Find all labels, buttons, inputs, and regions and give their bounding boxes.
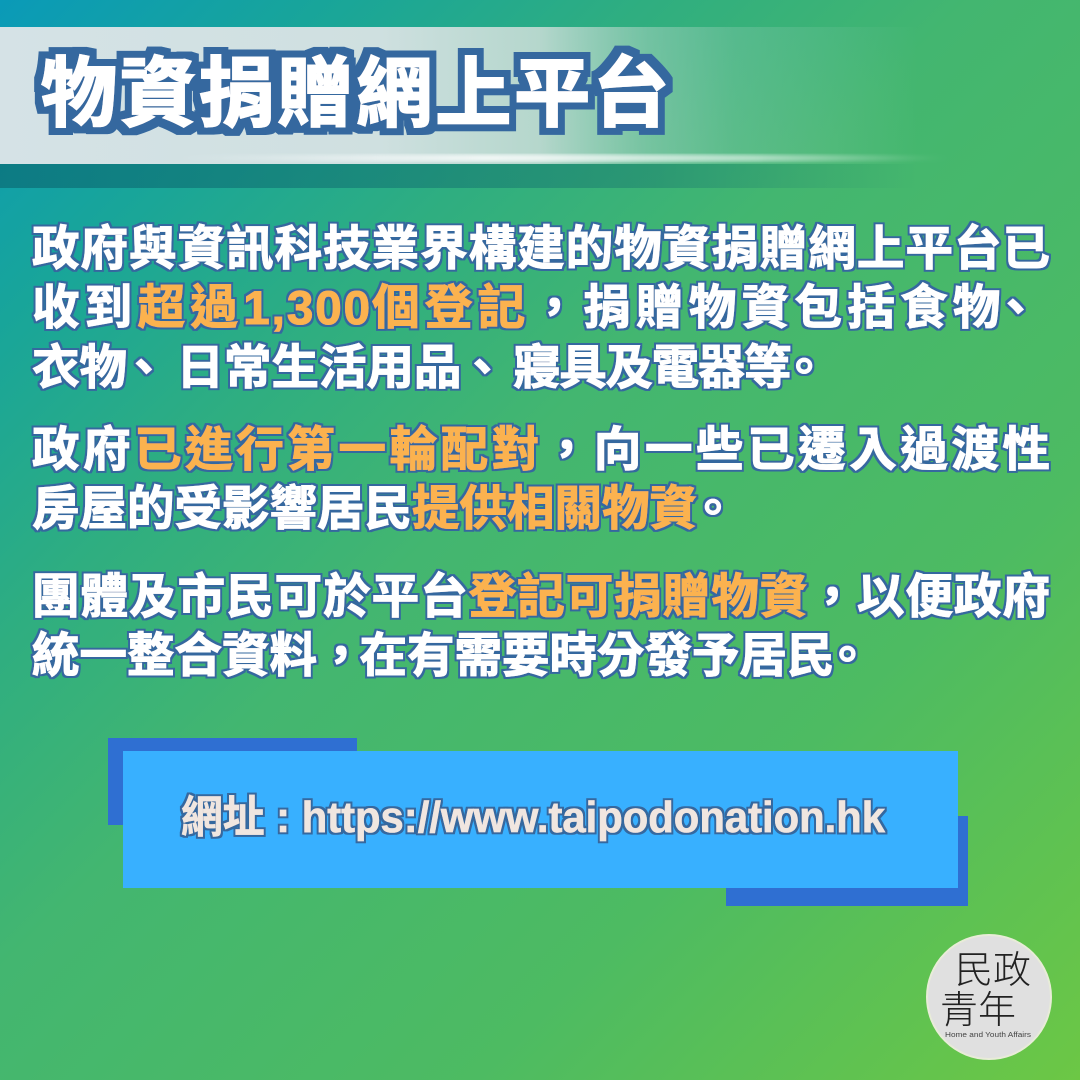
url text: 網址 : https://www.taipodonation.hk — [181, 793, 886, 842]
title band — [0, 27, 1080, 188]
paragraph: platform registrations — [32, 223, 1050, 395]
paragraph: first round matching: 政府已進行第一輪配對，向一些已遷入過渡性 — [32, 424, 1050, 477]
paragraph: platform registrations: 衣物、日常生活用品、寢具及電器等。 — [32, 342, 828, 395]
logo: 民政青年 — [927, 935, 1051, 1059]
paragraph: first round matching: 房屋的受影響居民提供相關物資。 — [32, 483, 736, 536]
paragraph: platform registrations: 政府與資訊科技業界構建的物資捐贈網上平台已 — [32, 223, 1050, 276]
paragraph: platform registrations: 收到超過1,300個登記，捐贈物資包括食物、 — [32, 282, 1045, 335]
logo: 民政青年: Home and Youth Affairs — [945, 1032, 1032, 1039]
logo: 民政青年: 民政 — [955, 939, 1031, 994]
paragraph: register donations — [32, 571, 1050, 683]
paragraph: register donations: 統一整合資料，在有需要時分發予居民。 — [32, 630, 871, 683]
title: 物資捐贈網上平台 — [41, 52, 669, 137]
logo: 民政青年: 青年 — [940, 979, 1016, 1034]
paragraph: first round matching — [32, 424, 1050, 536]
url callout — [108, 738, 968, 906]
paragraph: register donations: 團體及市民可於平台登記可捐贈物資，以便政府 — [32, 571, 1050, 624]
